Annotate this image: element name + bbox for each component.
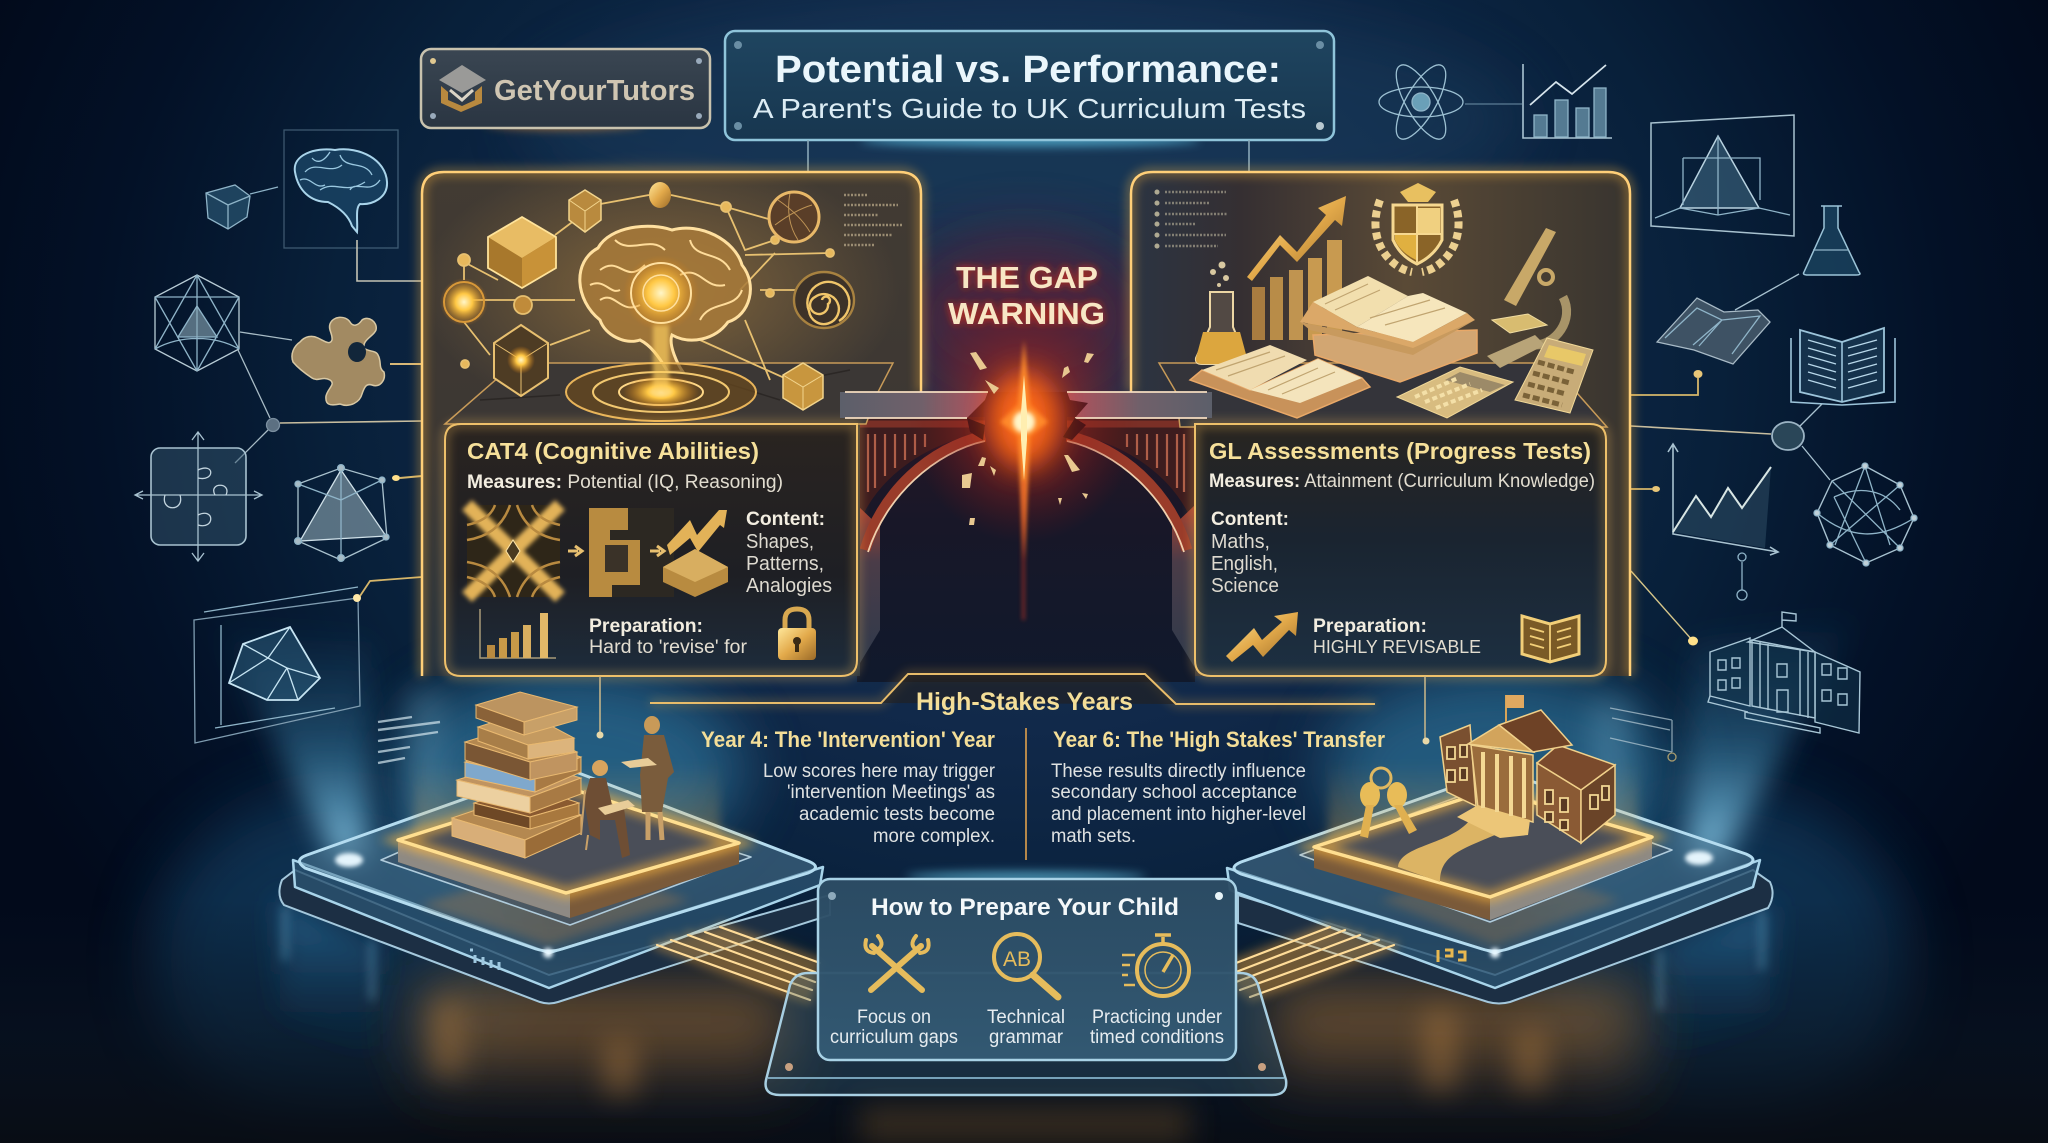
the gap warning text: THE GAP (956, 260, 1098, 295)
desk surface (445, 363, 893, 424)
icon: stopwatch (1122, 935, 1189, 996)
crack spark (992, 340, 1056, 620)
tip: grammar (987, 1007, 1065, 1048)
year 6 block: Year 6: The 'High Stakes' Transfer (1053, 727, 1385, 752)
tip: timed conditions: Practicing under (1092, 1007, 1223, 1028)
ripple base with light beam (566, 325, 756, 421)
GL content text: English, (1211, 553, 1278, 575)
year 4 block: more complex. (873, 826, 995, 847)
small hex cube (569, 190, 601, 232)
GL content text: Content: (1211, 509, 1289, 530)
panel: CAT4 (279, 150, 1773, 1095)
connector lines (808, 140, 1249, 172)
logo wordmark: GetYourTutors (494, 75, 695, 107)
the gap warning text (948, 260, 1105, 331)
icon: flask (1735, 206, 1860, 310)
CAT4 content text: Patterns, (746, 553, 824, 575)
tip: curriculum gaps: curriculum gaps (830, 1027, 958, 1048)
icon: gold rising arrow (1226, 612, 1298, 662)
bridge arch and gap (857, 235, 1195, 682)
floor reflections (280, 900, 1770, 1143)
glass top surface (1234, 773, 1753, 962)
CAT4 preparation text: Preparation: (589, 616, 703, 637)
side gold connectors (600, 676, 1425, 738)
big gold cube (488, 217, 556, 288)
front cube (783, 363, 823, 410)
left platform (279, 692, 830, 1004)
right platform (1227, 695, 1773, 1004)
card: CAT4 details (445, 424, 857, 676)
tip: timed conditions (1090, 1007, 1224, 1048)
left arch span (857, 417, 985, 668)
spiral target (794, 272, 854, 328)
CAT4 preparation text: Hard to 'revise' for (589, 637, 748, 658)
high-stakes heading: High-Stakes Years (916, 688, 1133, 716)
icon: gold keys (1360, 768, 1417, 838)
CAT4 heading: CAT4 (Cognitive Abilities) (467, 438, 759, 464)
icon: book stack (452, 692, 581, 858)
icon: seated student and teacher (581, 716, 674, 858)
the gap warning text: WARNING (948, 296, 1105, 331)
icon: small bar chart (1523, 64, 1612, 138)
icon: tan puzzle piece (292, 317, 422, 405)
broken bridge deck and spark (840, 260, 1212, 620)
glowing orb (440, 278, 488, 326)
platform base plate (279, 860, 830, 1004)
golden brain (580, 226, 750, 372)
icon: jigsaw square with arrows (135, 432, 262, 561)
left bridge slab (840, 392, 988, 440)
year 4 block: academic tests become (799, 804, 995, 825)
CAT4 content text (746, 509, 832, 597)
icon: blue brain in frame (284, 130, 422, 281)
icon: wave pattern (467, 505, 560, 597)
icon: flask (1196, 262, 1247, 364)
icon: rising line chart (1631, 444, 1778, 600)
CAT4 measures: Measures: Potential (IQ, Reasoning) (467, 472, 783, 493)
year 6 block: and placement into higher-level (1051, 804, 1306, 825)
icon: wire hexagon pyramid (155, 275, 292, 418)
logo panel (421, 49, 710, 129)
right bridge slab (1063, 392, 1212, 440)
icon: reasoning sequence (568, 508, 728, 597)
icon: small bars (480, 609, 556, 658)
left side blueprint icons (135, 130, 440, 763)
GL preparation text: HIGHLY REVISABLE (1313, 637, 1481, 657)
glowing tier (398, 762, 739, 918)
tiny text lines (844, 195, 902, 245)
CAT4 content text: Shapes, (746, 531, 814, 553)
year 4 block: Year 4: The 'Intervention' Year (701, 727, 995, 752)
icon: small cube (206, 185, 278, 229)
GL preparation text: Preparation: (1313, 616, 1427, 637)
light beams (215, 610, 1860, 860)
debris shards (962, 352, 1094, 525)
small text block (378, 717, 440, 763)
icon: network node (235, 418, 422, 463)
tip: timed conditions: timed conditions (1090, 1027, 1224, 1048)
icon: front calculator (1397, 367, 1513, 418)
icon: blue open book (1791, 328, 1895, 405)
GL content text (1211, 509, 1289, 597)
icon: atom (1379, 58, 1522, 146)
icon: side calculator (1515, 338, 1593, 413)
icon: upper book pile (1300, 276, 1477, 382)
panel: how to prepare (766, 872, 1286, 1095)
title panel (725, 31, 1334, 146)
year 4 block (701, 727, 996, 847)
icon: pyramid frame (1651, 115, 1794, 236)
GL preparation text (1313, 616, 1481, 657)
CAT4 content text: Analogies (746, 575, 832, 597)
title heading: Potential vs. Performance: (775, 49, 1281, 91)
right arch span (1067, 417, 1195, 668)
GL content text: Maths, (1211, 531, 1270, 553)
tip: grammar: Technical (987, 1007, 1065, 1028)
icon: gold school (1398, 695, 1615, 882)
panel: high-stakes years (596, 674, 1430, 860)
icon: microscope (1487, 228, 1567, 368)
desk surface (1159, 363, 1607, 427)
GL content text: Science (1211, 575, 1279, 597)
right side blueprint icons (1379, 58, 1917, 761)
year 6 block (1051, 727, 1385, 847)
icon: AB magnifier (994, 934, 1058, 997)
sphere with mesh (769, 192, 819, 242)
CAT4 preparation text (589, 616, 748, 658)
upper panel frame (420, 150, 921, 676)
icon: wire cube pyramid (295, 465, 422, 561)
platform base plate (1227, 860, 1773, 1004)
tiny text lines (1157, 192, 1228, 246)
glowing tier (1314, 762, 1652, 920)
GL heading: GL Assessments (Progress Tests) (1209, 438, 1591, 464)
tip: curriculum gaps: Focus on (857, 1007, 931, 1028)
icon: AB magnifier: AB (1003, 948, 1031, 971)
icon: crossed wrenches (865, 936, 929, 990)
icon: graduation cap shield (439, 65, 486, 112)
icon: blueprint school (1631, 571, 1860, 733)
year 6 block: secondary school acceptance (1051, 782, 1297, 803)
icon: gold book (1522, 616, 1579, 662)
year 4 block: 'intervention Meetings' as (787, 782, 995, 803)
gold circuit traces (657, 927, 1394, 1000)
icon: right network node (1631, 404, 1830, 480)
year 6 block: math sets. (1051, 826, 1136, 847)
icon: network sphere (1814, 463, 1917, 566)
small data lines (1610, 708, 1676, 761)
prepare heading: How to Prepare Your Child (871, 894, 1179, 921)
icon: grey open book (1657, 298, 1770, 364)
gold sphere (649, 182, 671, 208)
upper panel frame (1131, 172, 1630, 676)
year 6 block: These results directly influence (1051, 761, 1306, 782)
icon: geometry chart board (194, 577, 422, 743)
icon: padlock (778, 609, 816, 660)
card: GL details (1195, 424, 1606, 676)
icon: gold pin link (1631, 370, 1702, 395)
icon: lower open book (1190, 345, 1370, 418)
GL measures: Measures: Attainment (Curriculum Knowledge) (1209, 471, 1595, 492)
tip: grammar: grammar (989, 1027, 1064, 1048)
CAT4 content text: Content: (746, 509, 825, 530)
wire hexagon (494, 325, 548, 396)
glass top surface (299, 768, 816, 970)
subtitle: A Parent's Guide to UK Curriculum Tests (753, 93, 1306, 124)
panel: GL Assessments (1131, 172, 1630, 676)
year 4 block: Low scores here may trigger (763, 761, 996, 782)
icon: crest (1375, 183, 1459, 272)
network illustration (440, 182, 902, 676)
bar chart with arrow (1247, 196, 1346, 340)
tip: curriculum gaps (830, 1007, 958, 1048)
